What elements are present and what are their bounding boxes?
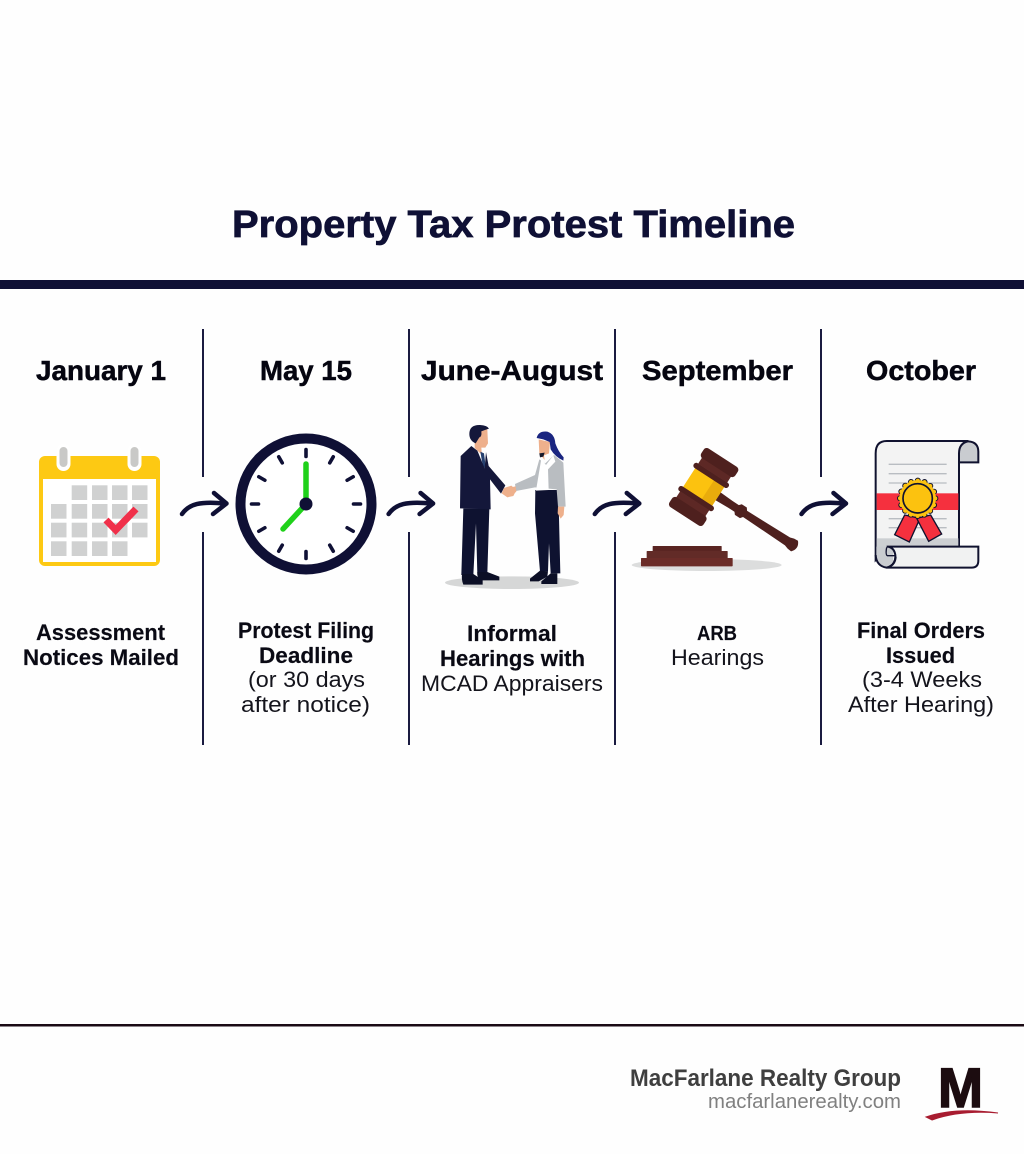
step description: (3-4 Weeks <box>862 667 982 692</box>
logo: M with red swoosh: M <box>938 1056 983 1119</box>
step description: Final Orders <box>857 618 985 643</box>
step description: Deadline <box>259 643 353 668</box>
arrow: step 2 to step 3 <box>389 493 433 514</box>
date heading: May 15 <box>260 355 352 386</box>
step description: (or 30 days <box>248 667 365 692</box>
icon: calendar <box>39 451 160 566</box>
step description: Informal <box>467 621 557 646</box>
icon: gavel <box>632 446 816 577</box>
step description <box>421 621 603 696</box>
date heading: October <box>866 355 976 386</box>
step description <box>848 618 994 717</box>
step 2: May 15 <box>238 355 374 717</box>
step description: Issued <box>886 643 955 668</box>
step 3: June-August <box>421 355 603 696</box>
step description <box>671 622 764 670</box>
step description: Hearings <box>671 645 764 670</box>
date heading: June-August <box>421 355 603 386</box>
arrow: step 4 to step 5 <box>802 493 846 514</box>
header rule <box>0 280 1024 289</box>
footer brand text <box>630 1065 901 1113</box>
step description: After Hearing) <box>848 692 994 717</box>
step description: Protest Filing <box>238 618 374 643</box>
footer rule <box>0 1024 1024 1026</box>
step 5: October <box>848 355 994 717</box>
step description <box>23 620 179 670</box>
gavel head and handle <box>667 446 816 577</box>
footer brand text: MacFarlane Realty Group <box>630 1065 901 1092</box>
arrow: step 3 to step 4 <box>595 493 639 514</box>
date heading: January 1 <box>36 355 166 386</box>
step description <box>238 618 374 717</box>
arrow: step 1 to step 2 <box>182 493 226 514</box>
icon: two people shaking hands <box>445 425 579 589</box>
man <box>460 425 516 585</box>
step description: Assessment <box>36 620 166 645</box>
sound block <box>641 546 733 566</box>
step description: MCAD Appraisers <box>421 671 603 696</box>
woman <box>511 432 566 584</box>
step 1: January 1 <box>23 355 179 670</box>
step 4: September <box>632 355 816 670</box>
footer brand text: macfarlanerealty.com <box>708 1091 901 1113</box>
logo: M with red swoosh <box>926 1056 998 1120</box>
step description: ARB <box>697 622 737 645</box>
step description: Notices Mailed <box>23 645 179 670</box>
step description: Hearings with <box>440 646 585 671</box>
title: Property Tax Protest Timeline <box>232 204 795 246</box>
icon: clock <box>240 438 372 570</box>
step description: after notice) <box>241 692 370 717</box>
date heading: September <box>642 355 793 386</box>
icon: certificate scroll with seal <box>876 441 978 568</box>
